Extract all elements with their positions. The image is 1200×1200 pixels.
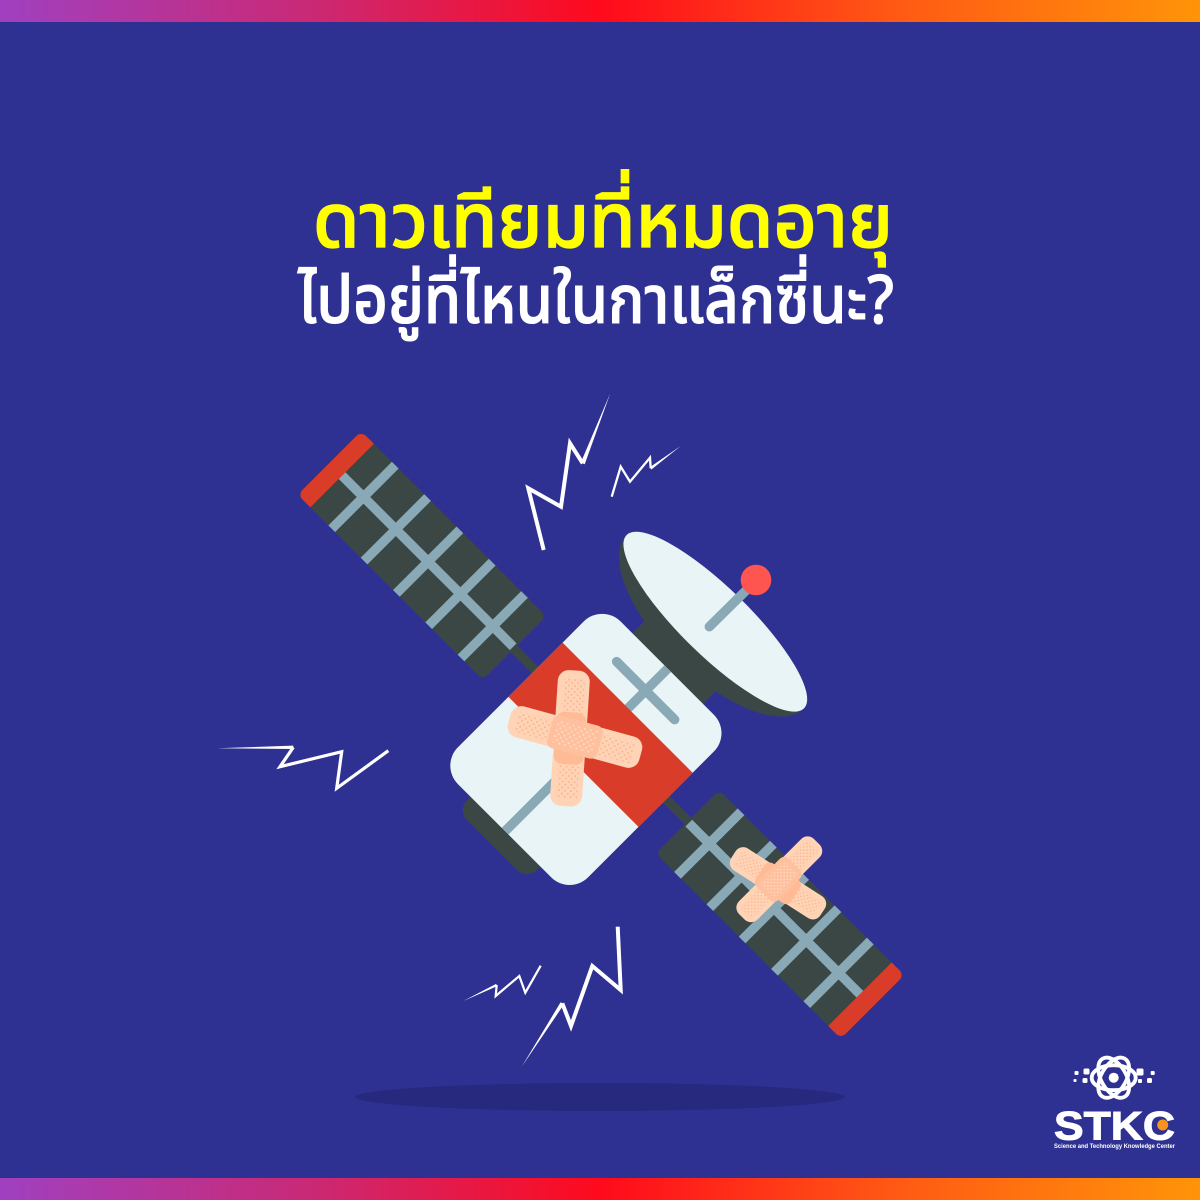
logo tagline: Science and Technology Knowledge Center bbox=[1054, 1144, 1176, 1150]
lightning bolt: top small bbox=[612, 446, 681, 497]
logo atom icon bbox=[1092, 1052, 1136, 1103]
satellite bbox=[298, 431, 904, 1039]
connecting arm: lower bbox=[655, 788, 700, 833]
logo wordmark: STKC bbox=[1054, 1104, 1175, 1148]
solar panel: lower right bbox=[656, 790, 904, 1039]
title bbox=[297, 167, 894, 354]
bandage strip horizontal bbox=[505, 703, 645, 771]
title line 2: ไปอยู่ที่ไหนในกาแล็กซี่นะ? bbox=[297, 253, 894, 354]
body back plates bbox=[456, 604, 733, 880]
dish antenna ball bbox=[741, 565, 771, 595]
dish stem bbox=[709, 588, 748, 627]
logo side dots bbox=[1074, 1068, 1155, 1083]
bandage strip diagonal down bbox=[726, 843, 830, 924]
bandage on solar panel bbox=[726, 832, 830, 927]
ground shadow bbox=[355, 1083, 845, 1111]
lightning bolt: top large bbox=[528, 393, 610, 550]
logo orange dot bbox=[1157, 1120, 1168, 1130]
top gradient bar bbox=[0, 0, 1200, 22]
bandage on body bbox=[505, 669, 645, 807]
lightning bolt: bottom small bbox=[463, 966, 541, 1001]
bottom gradient bar bbox=[0, 1178, 1200, 1200]
satellite body bbox=[450, 614, 722, 885]
lightning bolt: bottom large bbox=[522, 927, 621, 1067]
bandage strip vertical bbox=[550, 669, 590, 807]
dish face bbox=[603, 511, 828, 733]
logo: STKC bbox=[1054, 1052, 1176, 1150]
bandage strip diagonal up bbox=[732, 832, 827, 927]
solar panel: upper left bbox=[298, 431, 546, 680]
bandage pad top layer bbox=[755, 855, 804, 904]
lightning bolt: left bbox=[217, 746, 388, 788]
satellite dish bbox=[589, 511, 828, 747]
connecting arm: upper bbox=[505, 640, 550, 685]
dish back bbox=[589, 535, 804, 747]
title line 1: ดาวเทียมที่หมดอายุ bbox=[313, 167, 893, 282]
